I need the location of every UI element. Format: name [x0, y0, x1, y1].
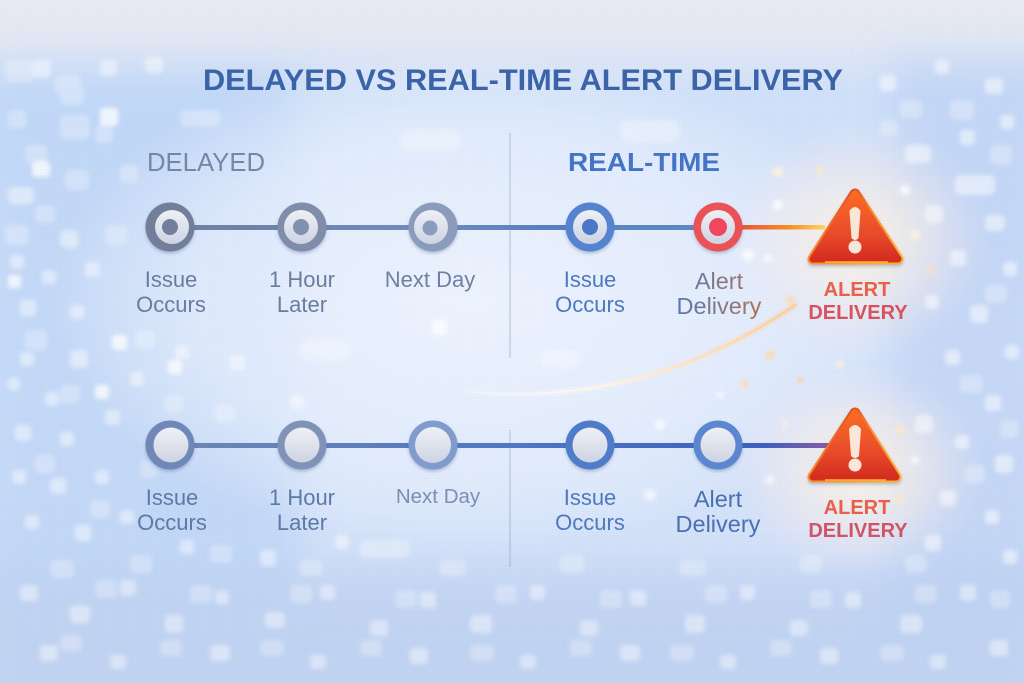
- light streak: [462, 305, 795, 394]
- node: bottom issue occurs: [146, 420, 194, 470]
- timeline: bottom row: [146, 413, 896, 480]
- node: bottom next day: [408, 420, 458, 470]
- label: alert callout: DELIVERY: [808, 302, 908, 324]
- label: bottom real-time alert delivery: Alert: [694, 486, 743, 512]
- labels: top row: [136, 267, 908, 324]
- label: real-time issue occurs: Issue: [564, 267, 616, 292]
- label: next day: Next Day: [385, 267, 475, 292]
- timeline: top row: [146, 194, 898, 262]
- node: real-time alert delivery: [694, 202, 742, 252]
- label: 1 hour later: Later: [277, 292, 327, 317]
- divider: top: [509, 133, 511, 358]
- divider: bottom: [509, 430, 511, 567]
- node: delayed next day: [408, 202, 458, 252]
- label: bottom 1 hour later: 1 Hour: [269, 485, 335, 510]
- node: delayed 1 hour later: [278, 202, 326, 252]
- node: bottom real-time issue occurs: [566, 420, 614, 470]
- label: real-time alert delivery: Alert: [695, 268, 744, 294]
- icon: warning triangle bottom: [813, 413, 896, 480]
- label: alert callout: ALERT: [824, 279, 890, 301]
- node: bottom real-time alert delivery: [694, 420, 742, 470]
- connector line: real-time top: [590, 225, 720, 230]
- label: bottom issue occurs: Issue: [146, 485, 198, 510]
- node: bottom 1 hour later: [278, 420, 326, 470]
- title: DELAYED VS REAL-TIME ALERT DELIVERY: [203, 64, 843, 97]
- label: bottom next day: Next Day: [396, 485, 481, 508]
- label: bottom issue occurs: Occurs: [137, 510, 207, 535]
- node: real-time issue occurs: [566, 202, 614, 252]
- label: bottom real-time issue occurs: Issue: [564, 485, 616, 510]
- sparkles: [644, 166, 934, 504]
- label: 1 hour later: 1 Hour: [269, 267, 335, 292]
- labels: bottom row: [137, 485, 908, 542]
- connector line: top: [170, 225, 600, 230]
- heading: real-time: REAL-TIME: [568, 147, 720, 177]
- label: bottom alert callout: ALERT: [824, 497, 890, 519]
- label: bottom alert callout: DELIVERY: [808, 520, 908, 542]
- label: bottom real-time alert delivery: Delivery: [676, 511, 761, 537]
- label: issue occurs: Occurs: [136, 292, 206, 317]
- label: real-time alert delivery: Delivery: [677, 293, 762, 319]
- label: real-time issue occurs: Occurs: [555, 292, 625, 317]
- label: bottom 1 hour later: Later: [277, 510, 327, 535]
- label: bottom real-time issue occurs: Occurs: [555, 510, 625, 535]
- icon: warning triangle top: [813, 194, 898, 262]
- node: delayed issue occurs: [146, 202, 194, 252]
- connector line: bottom: [170, 443, 830, 448]
- connector line: alert glow: [740, 225, 825, 230]
- heading: delayed: DELAYED: [147, 147, 265, 177]
- label: issue occurs: Issue: [145, 267, 197, 292]
